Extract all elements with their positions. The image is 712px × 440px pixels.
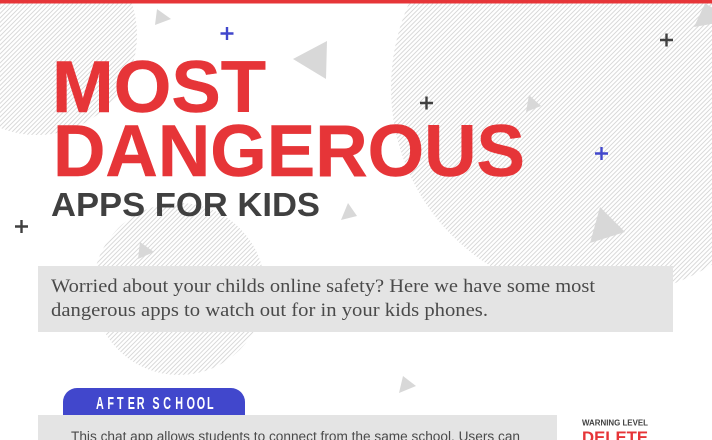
warning level: WARNING LEVEL [582, 418, 648, 428]
hatched circle: lower centre [93, 203, 265, 375]
app tab: After School [63, 388, 245, 415]
title: APPS FOR KIDS [51, 186, 320, 223]
plus marks [15, 27, 673, 233]
title: DANGEROUS [53, 111, 525, 192]
hatched circle: right [391, 0, 712, 297]
top red bar [0, 0, 712, 4]
app tab: After School: AFTER SCHOOL [96, 394, 214, 414]
app description panel [38, 415, 557, 440]
decorative triangles [138, 4, 712, 393]
hatched circle: top left [0, 0, 137, 135]
title: MOST [52, 47, 266, 128]
intro panel: Worried about your childs online safety? Here we have some most [51, 276, 596, 297]
title [51, 47, 525, 223]
warning level [582, 418, 648, 440]
intro panel: dangerous apps to watch out for in your kids phones. [51, 300, 488, 321]
intro panel [38, 266, 673, 332]
